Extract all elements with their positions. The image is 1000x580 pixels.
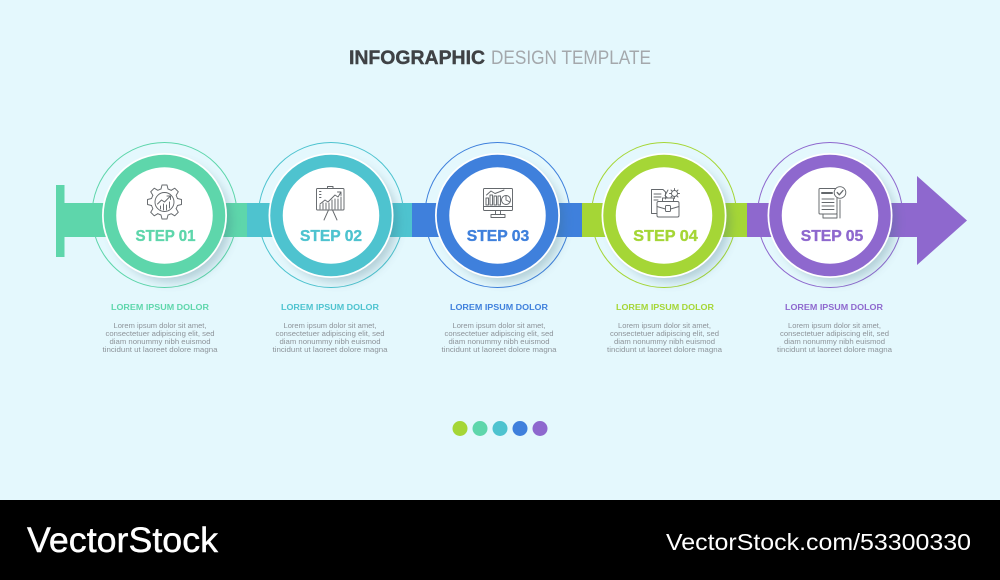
circle shadows	[111, 162, 896, 282]
text block: step 05: tincidunt ut laoreet dolore magna	[777, 345, 893, 354]
text block: step 02: tincidunt ut laoreet dolore magna	[272, 345, 389, 354]
text block: step 01: Lorem ipsum dolor sit amet,	[114, 321, 206, 330]
step label: STEP 05	[801, 228, 864, 245]
text block: step 01: LOREM IPSUM DOLOR	[111, 302, 210, 312]
footer bar	[0, 500, 1000, 580]
thin outer rings	[92, 142, 902, 288]
text block: step 04: Lorem ipsum dolor sit amet,	[618, 321, 711, 330]
footer bar: VectorStock	[27, 521, 219, 560]
title	[349, 47, 651, 69]
text block: step 05: diam nonummy nibh euismod	[784, 337, 885, 346]
step label: STEP 04	[633, 228, 698, 245]
timeline arrow band	[56, 176, 967, 265]
step label: STEP 01	[136, 228, 196, 245]
text block: step 03: tincidunt ut laoreet dolore magna	[442, 345, 558, 354]
text block: step 02: Lorem ipsum dolor sit amet,	[284, 321, 376, 330]
text block: step 02: consectetuer adipiscing elit, sed	[276, 329, 384, 338]
text block: step 05: LOREM IPSUM DOLOR	[785, 302, 884, 312]
icon: monitor dashboard	[484, 188, 512, 218]
text block: step 04: diam nonummy nibh euismod	[614, 337, 715, 346]
icon: document and briefcase	[652, 188, 680, 217]
text block: step 01: diam nonummy nibh euismod	[110, 337, 210, 346]
text block: step 03: Lorem ipsum dolor sit amet,	[452, 321, 546, 330]
colour dots	[452, 421, 548, 436]
panel: step 03	[435, 153, 560, 278]
text block: step 01: tincidunt ut laoreet dolore magna	[102, 345, 219, 354]
title: DESIGN TEMPLATE	[491, 48, 651, 69]
text block: step 04: consectetuer adipiscing elit, sed	[610, 329, 719, 338]
title: INFOGRAPHIC	[349, 47, 485, 69]
panel: step 02	[268, 153, 394, 278]
text block: step 05: consectetuer adipiscing elit, sed	[780, 329, 889, 338]
text block: step 03: diam nonummy nibh euismod	[448, 337, 550, 346]
text block: step 04	[607, 302, 723, 354]
text block: step 04: LOREM IPSUM DOLOR	[616, 302, 715, 312]
text block: step 05: Lorem ipsum dolor sit amet,	[788, 321, 881, 330]
step label: STEP 02	[300, 228, 362, 245]
icon: documents with checkmark	[819, 187, 846, 218]
panel: step 05	[768, 153, 892, 278]
text block: step 02	[272, 302, 389, 354]
text block: step 01: consectetuer adipiscing elit, sed	[106, 329, 214, 338]
footer bar: VectorStock.com/53300330	[666, 529, 971, 555]
text block: step 02: diam nonummy nibh euismod	[280, 337, 380, 346]
icon: presentation board	[316, 186, 344, 220]
text block: step 04: tincidunt ut laoreet dolore magna	[607, 345, 723, 354]
text block: step 02: LOREM IPSUM DOLOR	[281, 302, 380, 312]
icon: gear with chart	[148, 185, 182, 219]
step label: STEP 03	[467, 228, 530, 245]
text block: step 01	[102, 302, 219, 354]
text block: step 03	[442, 302, 558, 354]
text block: step 05	[777, 302, 893, 354]
text block: step 03: LOREM IPSUM DOLOR	[450, 302, 549, 312]
panel: step 01	[102, 153, 227, 278]
text block: step 03: consectetuer adipiscing elit, sed	[444, 329, 554, 338]
panel: step 04	[602, 153, 726, 278]
